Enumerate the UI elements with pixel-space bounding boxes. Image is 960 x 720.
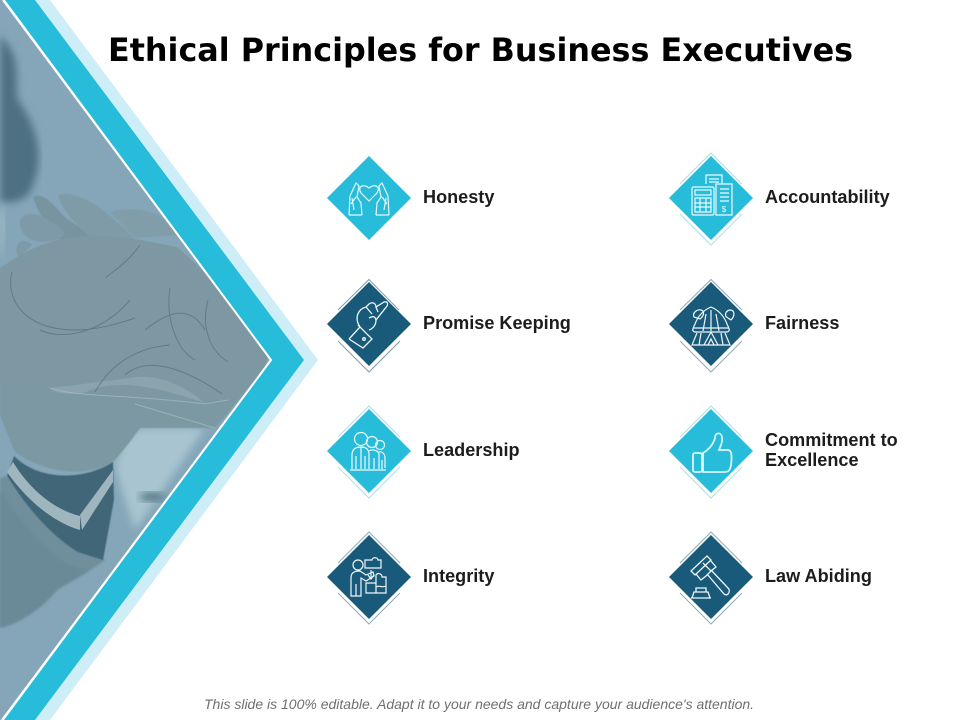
left photo and chevron panel <box>0 0 318 720</box>
title: Ethical Principles for Business Executives <box>108 32 853 69</box>
photo of clasped hands <box>0 0 270 720</box>
icon: person with puzzle <box>327 531 411 625</box>
label: Leadership <box>423 440 520 460</box>
item: Fairness <box>669 278 839 373</box>
icon: thumbs up <box>669 405 753 499</box>
dollar sign: $ <box>722 205 727 214</box>
icon: caring hands with heart <box>327 156 411 240</box>
label: Law Abiding <box>765 566 872 586</box>
item: Commitment to Excellence <box>669 405 898 499</box>
label: Commitment to <box>765 430 898 450</box>
icon: carnival tent <box>669 278 753 373</box>
label: Integrity <box>423 566 494 586</box>
label: Accountability <box>765 187 890 207</box>
footer note: This slide is 100% editable. Adapt it to your needs and capture your audience's attention. <box>204 696 754 712</box>
label: Honesty <box>423 187 494 207</box>
label: Fairness <box>765 313 839 333</box>
label: Excellence <box>765 450 859 470</box>
item: Accountability <box>669 152 890 246</box>
item: Leadership <box>327 405 520 499</box>
light chevron band <box>35 0 318 720</box>
item: Integrity <box>327 531 494 625</box>
label <box>765 430 898 470</box>
blue chevron band <box>4 0 304 720</box>
icon: gavel <box>669 531 753 625</box>
white edge line <box>2 0 271 720</box>
icon: hand pointing finger <box>327 278 411 373</box>
item: Law Abiding <box>669 531 872 625</box>
icon: calculator and documents <box>669 152 753 246</box>
item: Honesty <box>327 156 494 240</box>
icon: group of people <box>327 405 411 499</box>
wrist and under-hand base <box>0 385 248 472</box>
item: Promise Keeping <box>327 278 571 373</box>
label: Promise Keeping <box>423 313 571 333</box>
